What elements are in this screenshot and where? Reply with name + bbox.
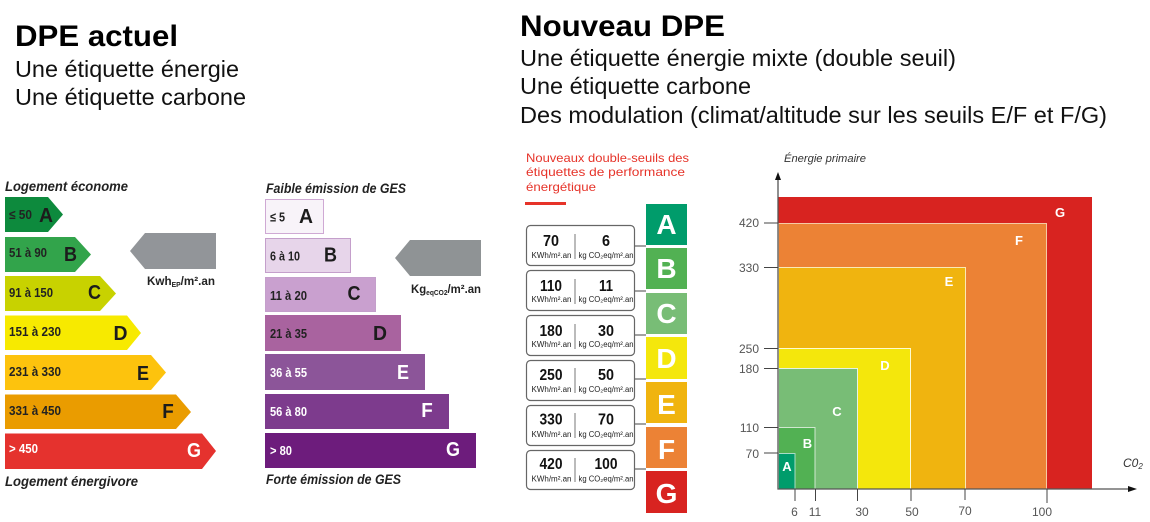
bar F <box>265 394 449 429</box>
arrow B: B <box>64 244 77 266</box>
bar D: D <box>373 323 387 345</box>
x labels: 70 <box>958 504 972 518</box>
bar G: G <box>446 439 460 461</box>
text: étiquette carbone: Une étiquette carbone <box>520 73 751 99</box>
heading: nouveaux double-seuils: énergétique <box>526 180 596 194</box>
threshold box D <box>526 360 634 400</box>
y ticks <box>764 223 778 453</box>
pointer: valeur énergie <box>130 233 216 269</box>
x labels <box>791 504 1052 519</box>
tile B: B <box>656 253 677 284</box>
x labels: 6 <box>791 505 798 519</box>
tile A: A <box>656 209 677 240</box>
arrow G <box>5 434 216 469</box>
unit: carbone: eqCO2 <box>426 290 448 297</box>
axis arrowheads <box>775 172 1137 492</box>
zone G: G <box>1055 205 1065 220</box>
zone A: A <box>782 459 792 474</box>
x labels: 30 <box>855 505 869 519</box>
axis title: CO2: 2 <box>1137 462 1143 471</box>
bar F: F <box>421 400 433 422</box>
bar C: 11 à 20 <box>270 288 307 303</box>
threshold box B <box>526 270 634 310</box>
bar B: 6 à 10 <box>270 248 300 264</box>
threshold box F: 420 <box>540 456 563 473</box>
bar C: C <box>348 283 360 305</box>
heading block: DPE actuel <box>15 20 246 110</box>
zone D: D <box>880 358 890 373</box>
threshold box F: kg CO₂eq/m².an <box>578 474 634 484</box>
threshold box A: 70 <box>543 233 559 250</box>
unit: carbone: Kg <box>411 282 427 296</box>
heading: nouveaux double-seuils: Nouveaux double-seuils des <box>526 151 689 165</box>
caption: logement énergivore: Logement énergivore <box>5 473 138 489</box>
bar F: 56 à 80 <box>270 404 307 419</box>
threshold box D: 50 <box>598 367 614 384</box>
threshold box F: KWh/m².an <box>532 474 572 484</box>
threshold box C: kg CO₂eq/m².an <box>578 340 634 349</box>
arrow D <box>5 316 141 350</box>
threshold box C <box>526 316 634 356</box>
tile D: D <box>656 343 677 374</box>
accent rule <box>525 202 566 205</box>
threshold box B: KWh/m².an <box>532 295 572 304</box>
arrow G: G <box>187 440 201 462</box>
threshold box E: kg CO₂eq/m².an <box>578 430 634 439</box>
title: DPE actuel: DPE actuel <box>15 20 178 53</box>
unit: énergie: /m².an <box>181 274 215 288</box>
tile E <box>646 382 687 423</box>
arrow E: 231 à 330 <box>9 364 61 379</box>
threshold box E: KWh/m².an <box>532 430 572 439</box>
bar B: B <box>324 244 337 266</box>
zone C <box>778 368 858 489</box>
arrow C: C <box>88 282 101 304</box>
threshold box E: 70 <box>598 412 614 428</box>
zone D <box>778 348 910 489</box>
threshold box F <box>526 450 634 490</box>
zone C: C <box>832 404 842 419</box>
tile F: F <box>658 434 675 465</box>
tile C: C <box>656 298 677 329</box>
y labels: 250 <box>739 342 759 356</box>
arrow A: A <box>39 205 53 227</box>
tile F <box>646 427 687 468</box>
zone F <box>778 224 1046 489</box>
heading: nouveaux double-seuils <box>526 151 689 194</box>
zone F: F <box>1015 233 1023 248</box>
bar G <box>265 433 476 468</box>
axes <box>778 178 1130 489</box>
text: étiquette carbone: Une étiquette carbone <box>15 84 246 110</box>
bar B <box>266 238 350 272</box>
bar A: A <box>299 206 313 228</box>
tile D <box>646 337 687 379</box>
tile E: E <box>657 389 676 420</box>
caption: logement économe: Logement économe <box>5 178 128 194</box>
arrow C <box>5 276 116 311</box>
y labels: 110 <box>740 421 759 435</box>
arrow B <box>5 237 91 272</box>
text: modulation: Des modulation (climat/altitude sur les seuils E/F et F/G) <box>520 102 1107 128</box>
tile G: G <box>656 478 677 509</box>
axis title: énergie primaire: Énergie primaire <box>784 152 866 165</box>
y labels: 180 <box>739 362 759 376</box>
zone B <box>778 428 815 489</box>
y labels: 330 <box>739 261 759 275</box>
bar G: > 80 <box>270 443 292 458</box>
tile B <box>646 248 687 289</box>
threshold box D: 250 <box>540 367 563 384</box>
threshold box A: 6 <box>602 233 610 250</box>
zone G <box>778 197 1092 489</box>
threshold box C: KWh/m².an <box>532 340 572 349</box>
arrow C: 91 à 150 <box>9 285 53 300</box>
threshold box B: 11 <box>599 278 613 295</box>
arrow B: 51 à 90 <box>9 245 47 260</box>
unit: énergie: EP <box>172 282 181 289</box>
zone A <box>778 454 795 489</box>
x labels: 11 <box>809 505 822 519</box>
threshold box E: 330 <box>540 412 563 428</box>
panel: étiquette énergie actuelle <box>5 178 216 489</box>
unit: carbone: /m².an <box>448 282 481 296</box>
y labels: 70 <box>746 447 759 461</box>
bar A <box>266 200 324 234</box>
x labels: 100 <box>1032 505 1052 519</box>
y labels: 420 <box>739 216 759 230</box>
panel: étiquette carbone actuelle <box>265 180 481 487</box>
tile C <box>646 293 687 334</box>
bar D <box>265 315 401 351</box>
bar C <box>266 278 376 312</box>
arrow D: D <box>114 323 128 345</box>
threshold box E <box>526 406 634 446</box>
threshold box F: 100 <box>594 456 618 473</box>
text: étiquette énergie: Une étiquette énergie <box>15 56 239 82</box>
arrow F <box>5 394 191 429</box>
y labels <box>739 216 759 461</box>
arrow A <box>5 197 63 232</box>
threshold box A: KWh/m².an <box>532 251 572 260</box>
arrow F: 331 à 450 <box>9 403 61 418</box>
arrow F: F <box>162 401 174 423</box>
unit: énergie: Kwh <box>147 274 172 288</box>
caption: faible émission: Faible émission de GES <box>266 180 407 196</box>
arrow G: > 450 <box>9 441 38 456</box>
text: étiquette énergie mixte: Une étiquette énergie mixte (double seuil) <box>520 45 956 71</box>
tile A <box>646 204 687 245</box>
bar E: 36 à 55 <box>270 365 307 380</box>
bar E <box>265 354 425 390</box>
bar A: ≤ 5 <box>270 210 285 224</box>
zone E: E <box>945 274 954 289</box>
threshold box C: 180 <box>540 323 563 340</box>
pointer: valeur carbone <box>395 240 481 276</box>
arrow E <box>5 355 166 390</box>
x labels: 50 <box>905 505 919 519</box>
caption: forte émission: Forte émission de GES <box>266 471 402 487</box>
x ticks <box>795 489 1047 503</box>
zone B: B <box>803 436 812 451</box>
bar D: 21 à 35 <box>270 326 307 341</box>
threshold box C: 30 <box>598 323 614 340</box>
arrow D: 151 à 230 <box>9 324 61 339</box>
threshold box B: 110 <box>540 278 562 295</box>
threshold box A <box>526 226 634 266</box>
heading block: Nouveau DPE <box>520 10 1107 128</box>
bar E: E <box>397 362 409 384</box>
panel: doubles seuils <box>525 151 689 513</box>
tile G <box>646 471 687 513</box>
connector lines <box>635 246 646 469</box>
threshold box A: kg CO₂eq/m².an <box>578 251 634 260</box>
arrow A: ≤ 50 <box>9 207 32 222</box>
threshold box D: KWh/m².an <box>532 385 572 394</box>
heading: nouveaux double-seuils: étiquettes de performance <box>526 165 685 179</box>
title: Nouveau DPE: Nouveau DPE <box>520 10 725 43</box>
arrow E: E <box>137 363 149 385</box>
threshold box D: kg CO₂eq/m².an <box>578 385 634 394</box>
zone E <box>778 268 966 489</box>
axis title: CO2: C0 <box>1123 456 1138 470</box>
threshold box B: kg CO₂eq/m².an <box>578 295 634 304</box>
chart: énergie primaire vs CO2 <box>739 152 1143 519</box>
